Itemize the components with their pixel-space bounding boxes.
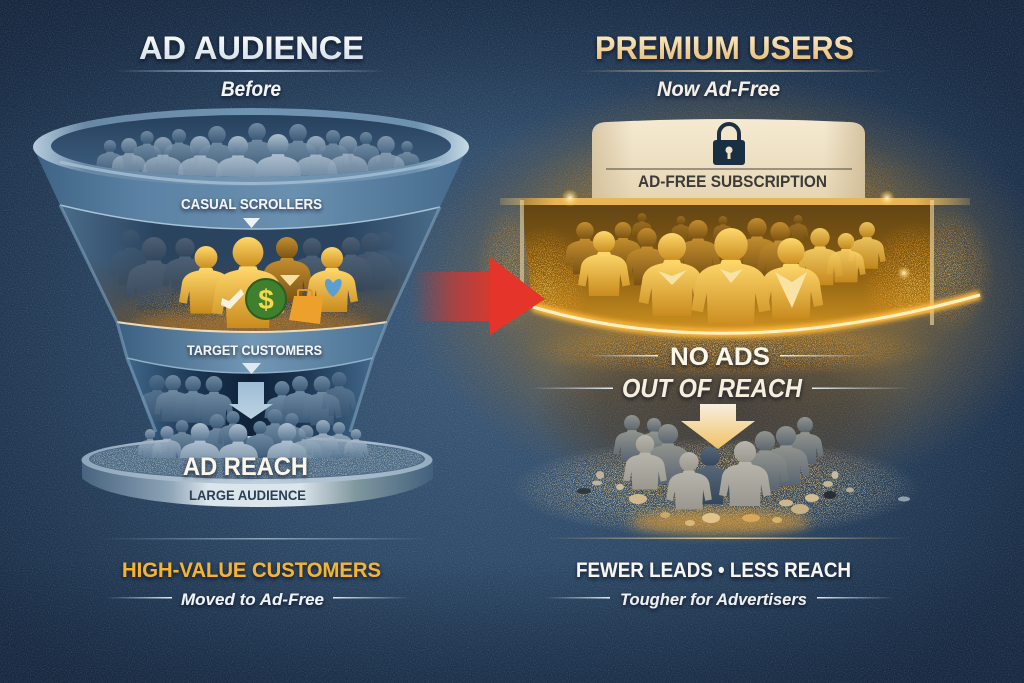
gold glass container	[500, 189, 980, 350]
heading: premium users: PREMIUM USERS	[595, 30, 854, 66]
icon: check mark	[221, 289, 244, 309]
funnel opening	[51, 115, 451, 177]
dust in funnel	[112, 282, 388, 331]
funnel lower section	[127, 358, 373, 440]
arrow: audience moves to premium	[412, 257, 545, 335]
icon: heart	[325, 279, 342, 297]
target customers	[179, 237, 358, 328]
pointer: casual	[243, 218, 260, 228]
heading: ad audience: AD AUDIENCE	[139, 30, 364, 66]
funnel middle section	[60, 205, 440, 332]
funnel top band	[33, 108, 469, 432]
caption: moved to ad-free: Moved to Ad-Free	[181, 590, 324, 609]
subheading: now ad-free: Now Ad-Free	[657, 78, 780, 101]
funnel target band	[117, 322, 387, 374]
pointer: target	[242, 363, 261, 374]
rubble and dust	[510, 438, 920, 538]
icon: dollar coin	[246, 279, 286, 319]
outer gold dust	[475, 130, 995, 378]
ad reach platform	[82, 409, 433, 507]
top crowd	[96, 123, 420, 177]
caption: tougher for advertisers: Tougher for Advertisers	[620, 590, 807, 609]
label: casual scrollers: CASUAL SCROLLERS	[181, 197, 322, 213]
label: target customers: TARGET CUSTOMERS	[187, 342, 322, 358]
heading: out of reach: OUT OF REACH	[622, 373, 803, 403]
icon: shopping bag	[289, 290, 323, 324]
label: ad-free subscription: AD-FREE SUBSCRIPTION	[638, 173, 827, 191]
glowing curve	[533, 295, 980, 333]
heading: no ads: NO ADS	[670, 343, 770, 371]
funnel	[33, 108, 469, 507]
arrow: down to crowd	[681, 404, 755, 449]
premium crowd	[564, 213, 886, 327]
subheading: before: Before	[221, 78, 281, 101]
funnel lower crowd	[138, 372, 357, 425]
panel: premium users	[475, 30, 995, 609]
platform crowd	[138, 409, 368, 458]
callout: fewer leads less reach: FEWER LEADS • LESS REACH	[576, 559, 851, 582]
icon: padlock	[713, 124, 745, 165]
icon: dollar coin: $	[258, 284, 274, 315]
panel: ad audience	[33, 30, 469, 609]
label: ad reach: AD REACH	[183, 453, 308, 481]
arrow: down into platform	[229, 382, 273, 419]
icon: chevron badge	[280, 275, 300, 286]
dropped crowd	[613, 415, 824, 509]
funnel rim	[33, 108, 469, 186]
subscription box	[592, 119, 865, 198]
callout: high-value customers: HIGH-VALUE CUSTOMERS	[122, 559, 381, 582]
faded middle crowd	[109, 230, 408, 310]
sparkle dust	[525, 222, 933, 318]
label: large audience: LARGE AUDIENCE	[189, 487, 306, 503]
